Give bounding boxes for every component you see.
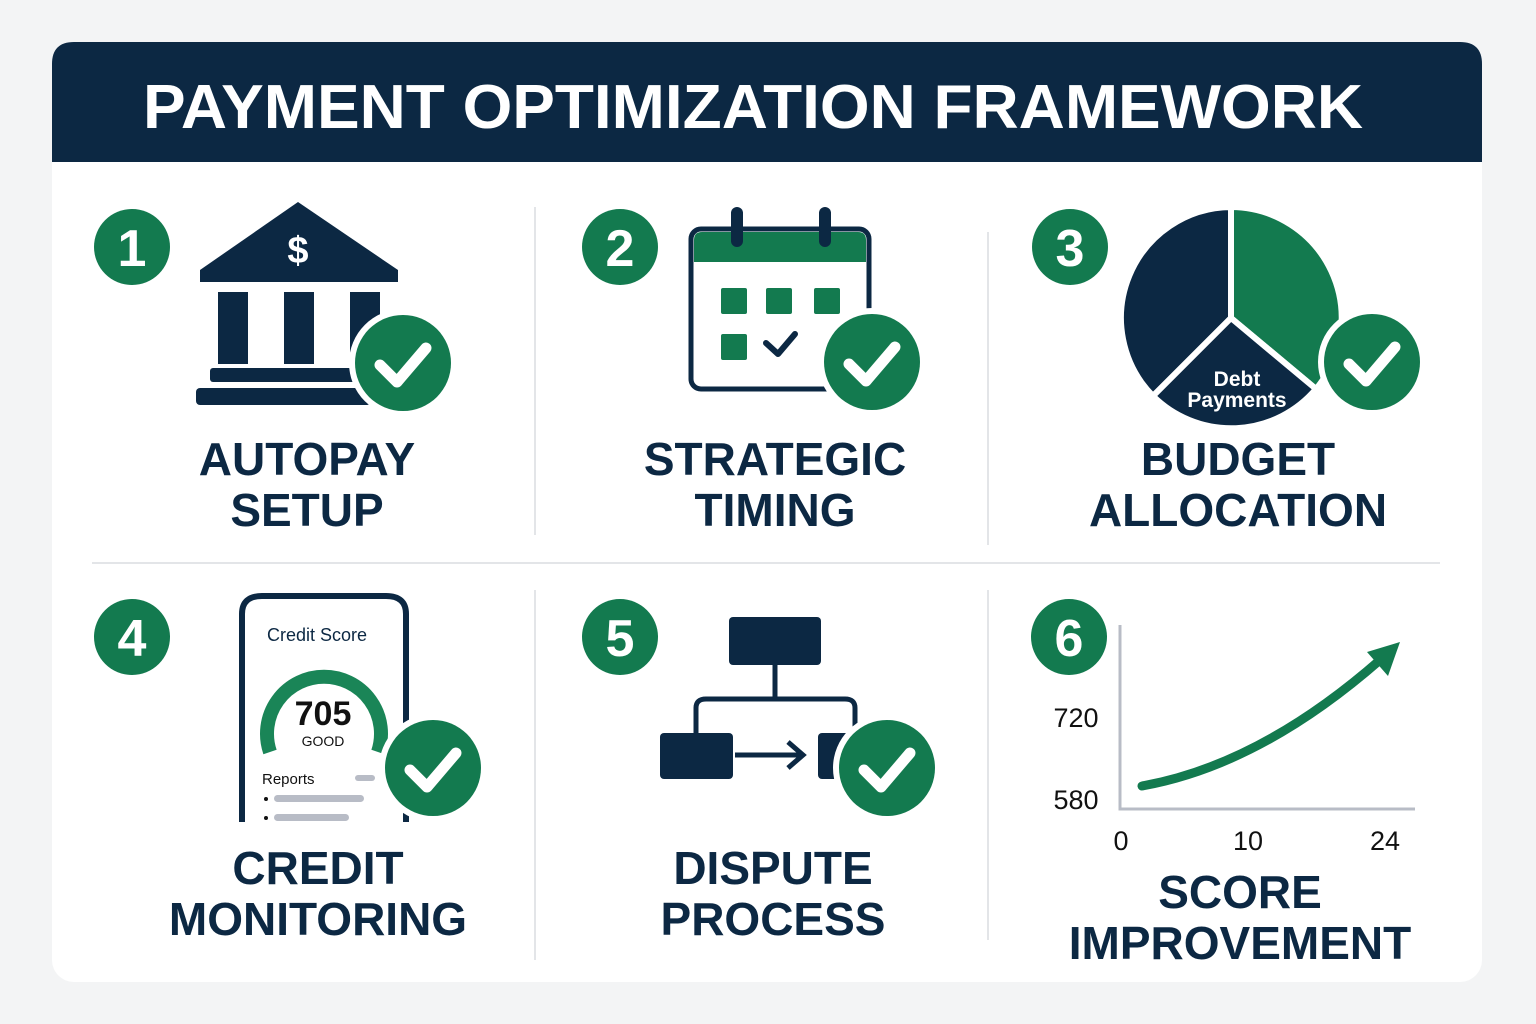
icon: calendar [691,207,869,389]
line chart: 580 [1053,785,1099,815]
label: IMPROVEMENT [1069,917,1411,969]
header banner [52,42,1482,162]
number badge 5 [582,599,658,675]
icon: phone with score: Credit Score [267,625,367,645]
icon: phone with score: GOOD [302,733,344,749]
icon: pie chart: Payments [1187,389,1287,412]
label: SETUP [230,484,384,536]
line chart [1053,625,1415,856]
icon: check [1318,308,1426,416]
line chart: 720 [1053,703,1099,733]
label: PROCESS [661,893,885,945]
number badge 1 [94,209,170,285]
icon: bank [196,202,398,405]
icon: check [818,308,926,416]
icon: check [833,714,941,822]
number badge 3 [1032,209,1108,285]
label: CREDIT [232,842,404,894]
icon: phone with score: 705 [295,695,351,733]
panel: strategic timing [582,207,926,536]
label: BUDGET [1141,433,1335,485]
line chart: 0 [1113,826,1129,856]
line chart: 24 [1370,826,1400,856]
label: STRATEGIC [644,433,906,485]
title: PAYMENT OPTIMIZATION FRAMEWORK [143,73,1363,142]
panel: score improvement [1031,599,1415,969]
label: SCORE [1158,866,1322,918]
number badge 4: 4 [118,610,147,668]
number badge 2 [582,209,658,285]
icon: pie chart [1121,207,1342,428]
number badge 3: 3 [1056,220,1084,278]
icon: flowchart [660,617,858,779]
number badge 6: 6 [1055,610,1083,668]
label: TIMING [695,484,855,536]
icon: pie chart: Debt [1214,368,1260,391]
number badge 1: 1 [118,220,146,278]
label: MONITORING [169,893,467,945]
number badge 4 [94,599,170,675]
icon: check [349,309,457,417]
number badge 5: 5 [606,610,634,668]
panel: dispute process [582,599,941,945]
icon: check [379,714,487,822]
panel: budget allocation [1032,207,1426,536]
line chart: 10 [1233,826,1263,856]
icon: phone with score [242,596,406,822]
number badge 2: 2 [606,220,634,278]
label: AUTOPAY [199,433,415,485]
icon: bank: $ [287,230,309,272]
panel: credit monitoring [94,596,487,945]
icon: phone with score: Reports [262,771,315,788]
label: ALLOCATION [1089,484,1387,536]
panel: autopay setup [94,202,457,536]
label: DISPUTE [673,842,873,894]
number badge 6 [1031,599,1107,675]
